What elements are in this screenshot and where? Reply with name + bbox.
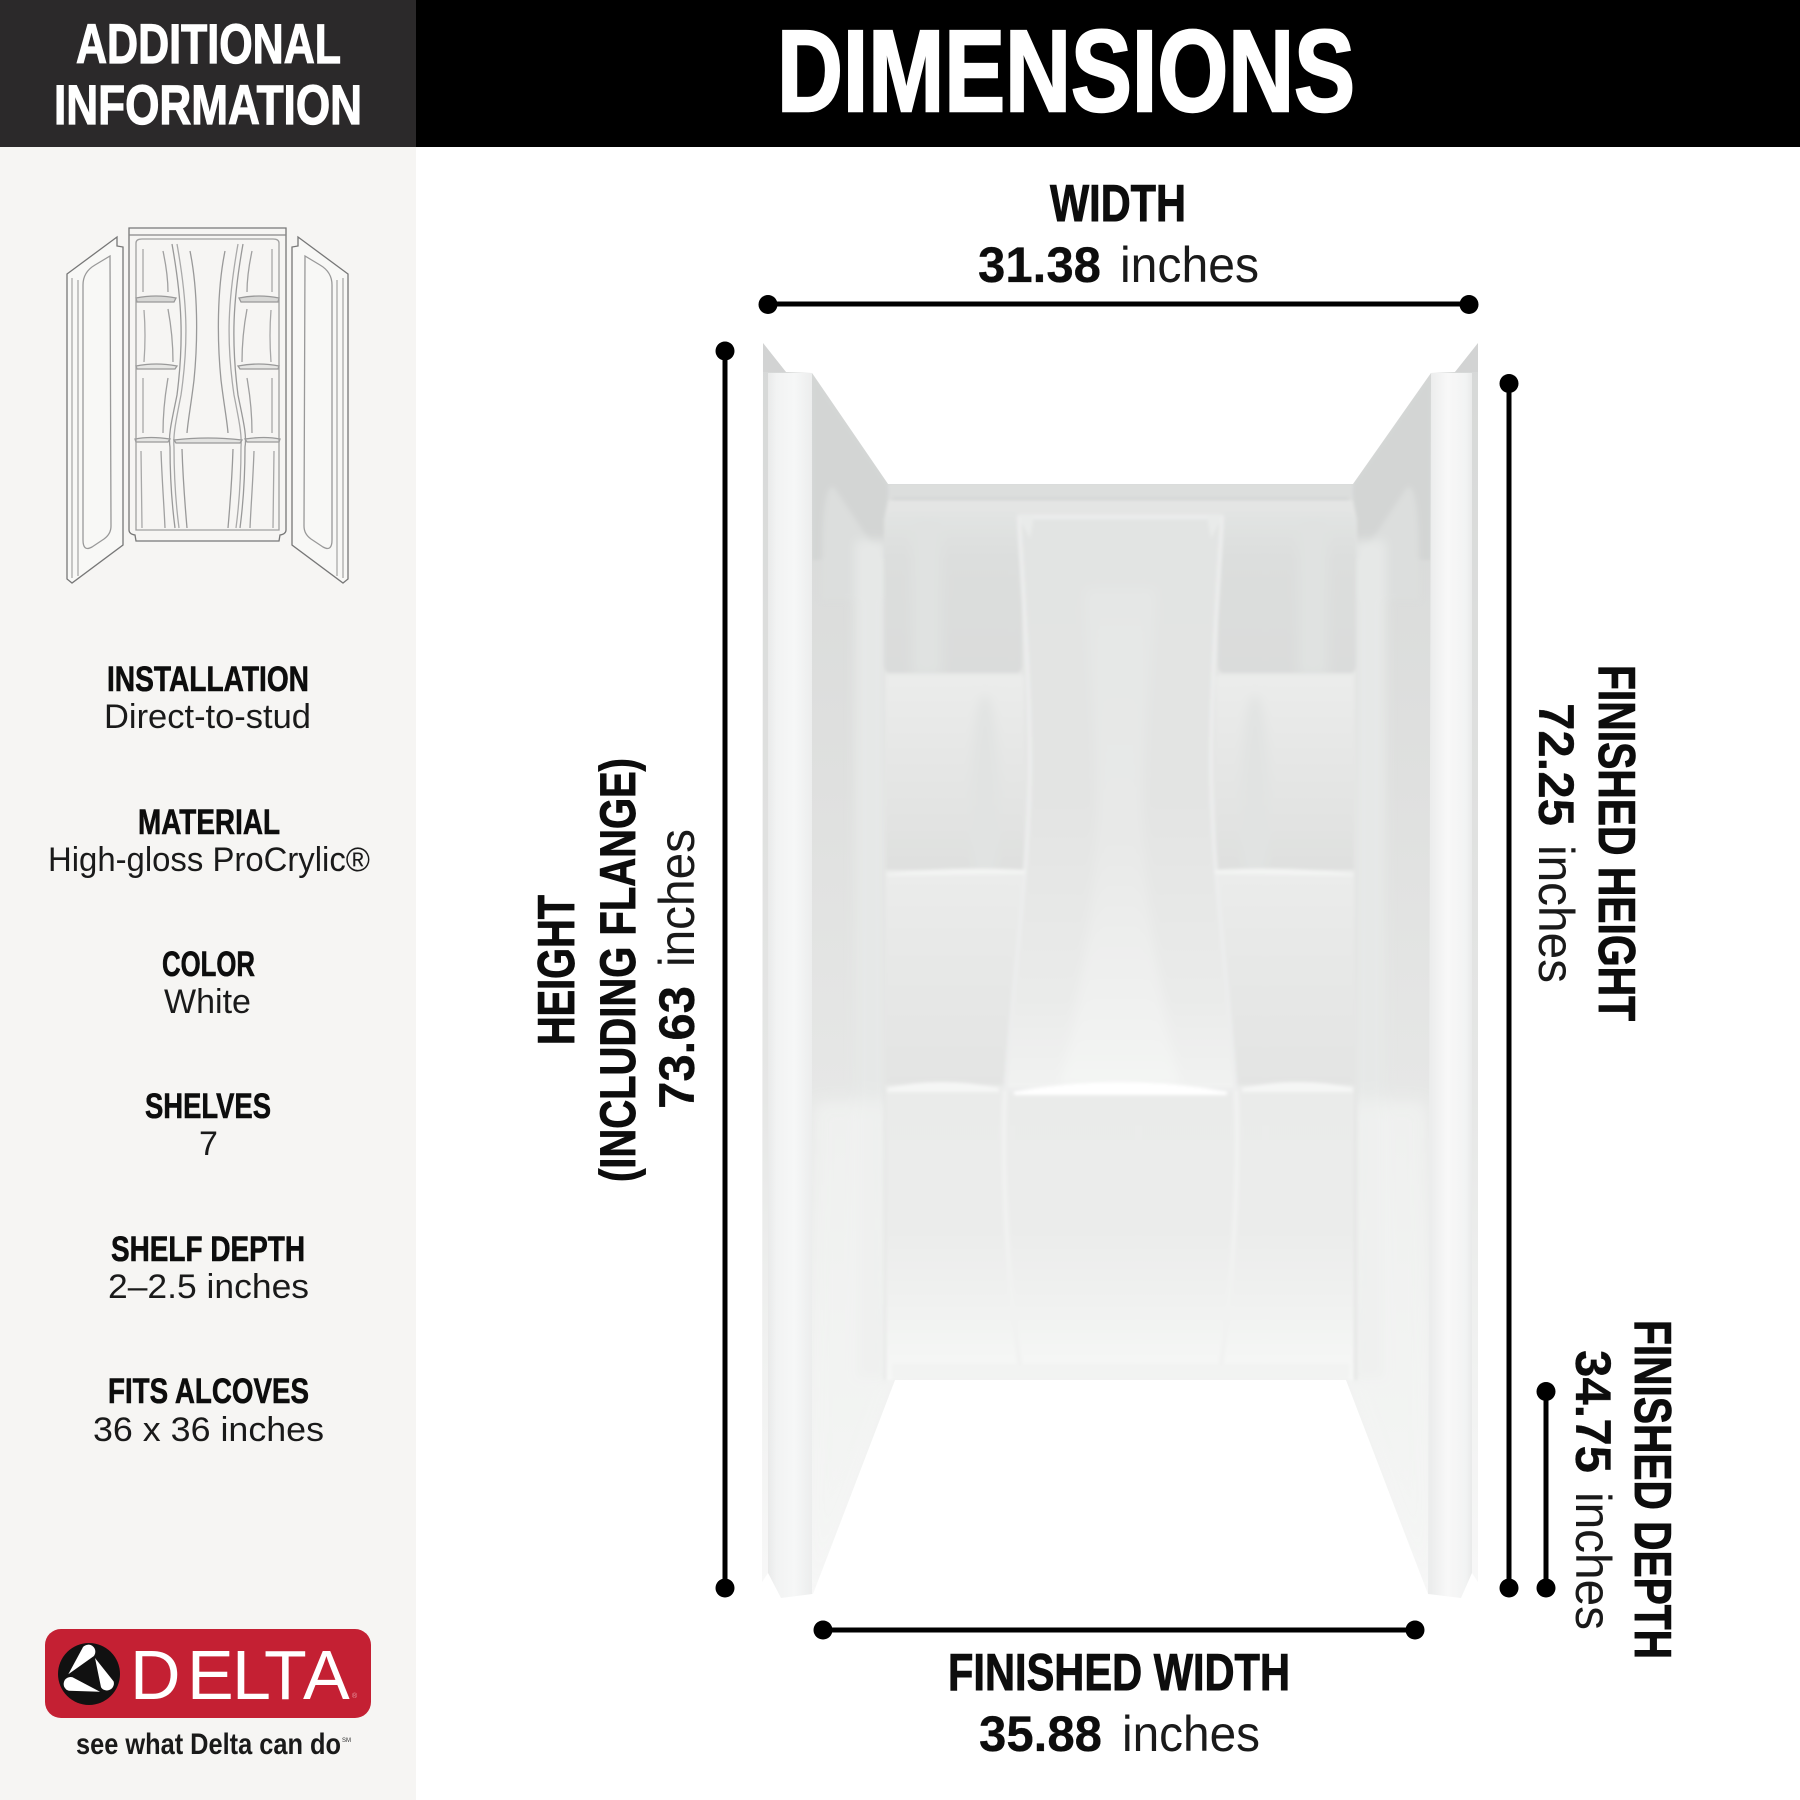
top ledge <box>888 484 1353 499</box>
label: finished width: 35.88 <box>979 1706 1102 1762</box>
shelf: row 2 highlights <box>941 869 1011 872</box>
label: finished depth: inches <box>1565 1492 1621 1630</box>
front panels <box>768 373 812 1598</box>
sidebar spec: material: MATERIAL <box>138 803 280 842</box>
sidebar spec: material <box>48 803 370 879</box>
dimension line: finished width <box>814 1620 1424 1640</box>
label: height including flange: (INCLUDING FLANGE) <box>590 758 646 1182</box>
label: finished depth: 34.75 <box>1565 1350 1621 1473</box>
label: finished depth <box>1565 1320 1681 1659</box>
dimension line: finished depth <box>1536 1382 1556 1598</box>
sidebar spec: installation <box>104 660 311 736</box>
corner seat highlight <box>1013 1082 1228 1095</box>
left side wall shading <box>812 373 888 560</box>
label: height including flange: HEIGHT <box>528 895 586 1045</box>
logo: Delta <box>45 1629 371 1761</box>
panel: additional information sidebar <box>0 0 416 1800</box>
bottom bays <box>886 1248 1354 1380</box>
label: finished height: inches <box>1528 845 1584 983</box>
label: height including flange: 73.63 <box>649 986 705 1109</box>
sidebar spec: shelves <box>145 1087 271 1163</box>
lower column edges <box>1004 1090 1237 1365</box>
logo: Delta: SM <box>342 1738 351 1744</box>
sidebar spec: shelf depth: 2–2.5 inches <box>108 1268 309 1306</box>
logo: Delta: DELTA <box>130 1636 350 1714</box>
label: height including flange: inches <box>649 829 705 967</box>
label: finished height: FINISHED HEIGHT <box>1587 665 1645 1021</box>
sidebar spec: shelf depth <box>108 1230 309 1306</box>
sidebar spec: color: White <box>164 983 251 1021</box>
sidebar header <box>0 0 416 147</box>
sidebar header: INFORMATION <box>54 73 362 136</box>
label: width: inches <box>1120 237 1259 293</box>
sidebar spec: color: COLOR <box>162 945 255 984</box>
flange tips <box>763 343 1478 372</box>
shelf: row 1 lines <box>886 673 1023 676</box>
column top highlights <box>1018 516 1223 538</box>
third row bays <box>977 876 993 886</box>
sidebar spec: fits alcoves <box>93 1372 324 1449</box>
logo: Delta: ® <box>352 1692 358 1700</box>
icon: exploded line drawing of shower wall set <box>67 228 348 583</box>
sidebar spec: shelf depth: SHELF DEPTH <box>111 1230 305 1269</box>
right side wall shading <box>1353 373 1431 560</box>
sidebar spec: installation: Direct-to-stud <box>104 698 311 736</box>
upper recess bays <box>886 560 1020 672</box>
logo: Delta: see what Delta can do <box>76 1728 341 1761</box>
label: width: WIDTH <box>1050 175 1186 233</box>
sidebar spec: color <box>162 945 255 1021</box>
sidebar header: ADDITIONAL <box>76 12 341 75</box>
sidebar spec: fits alcoves: 36 x 36 inches <box>93 1411 324 1449</box>
label: finished width: FINISHED WIDTH <box>948 1644 1290 1702</box>
second row bays <box>886 676 1024 870</box>
inner hourglass highlight <box>1060 590 1180 1085</box>
label: finished height <box>1528 665 1645 1021</box>
interior surfaces softened <box>822 501 1418 1170</box>
sidebar spec: shelves: 7 <box>199 1125 218 1163</box>
sidebar spec: shelves: SHELVES <box>145 1087 271 1126</box>
product photo: white shower wall set <box>755 340 1485 1602</box>
title banner: dimensions <box>416 0 1800 147</box>
label: width <box>978 175 1259 293</box>
dimension line: finished height <box>1500 374 1518 1598</box>
label: height including flange <box>528 758 705 1182</box>
label: width: 31.38 <box>978 237 1101 293</box>
label: finished depth: FINISHED DEPTH <box>1623 1320 1681 1659</box>
icon: Delta triangle mark <box>58 1643 120 1705</box>
sidebar spec: fits alcoves: FITS ALCOVES <box>108 1372 309 1411</box>
title banner: dimensions: DIMENSIONS <box>777 6 1355 136</box>
label: finished height: 72.25 <box>1528 703 1584 826</box>
rear wall <box>884 500 1357 1380</box>
label: finished width <box>948 1644 1290 1762</box>
dimension line: height including flange <box>716 342 734 1598</box>
sidebar spec: material: High-gloss ProCrylic® <box>48 841 370 879</box>
dimension line: width <box>758 295 1478 314</box>
shelf: row 3 highlights <box>889 1082 996 1091</box>
centre S-curve column <box>1005 517 1236 1090</box>
label: finished width: inches <box>1122 1706 1260 1762</box>
lower side walls fade <box>822 1107 882 1376</box>
sidebar spec: installation: INSTALLATION <box>107 660 309 699</box>
bottom ledge <box>892 1364 1349 1380</box>
